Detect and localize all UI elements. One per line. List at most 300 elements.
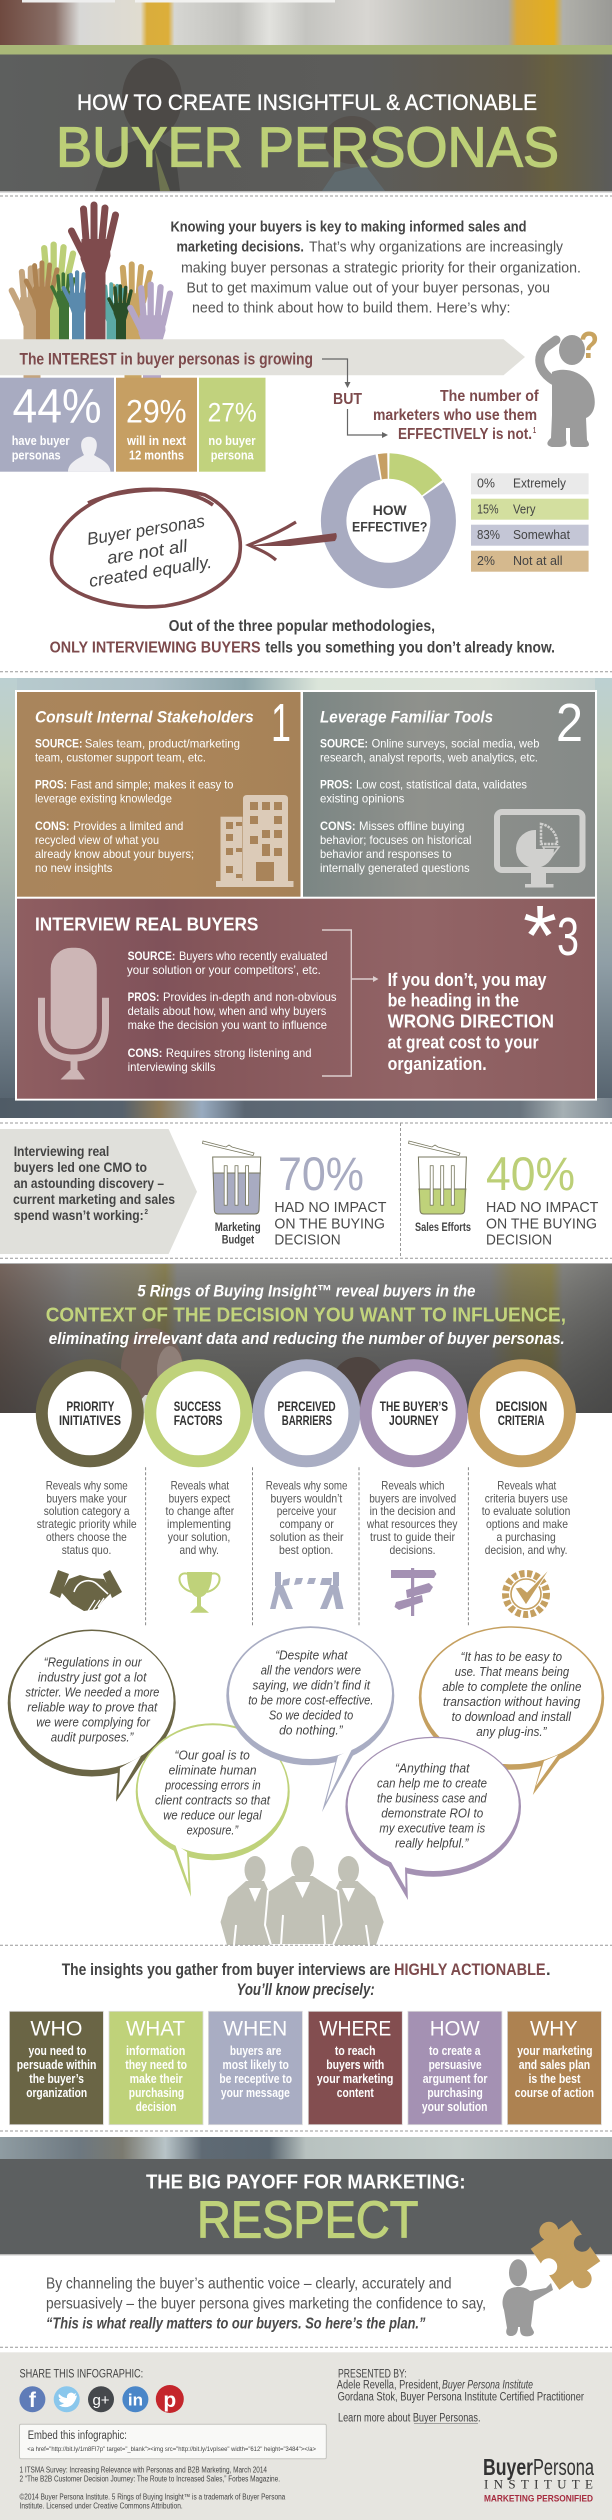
stat: 27% no buyer persona: 27% — [208, 398, 257, 428]
source pros cons text: make the decision you want to influence — [128, 1018, 327, 1032]
warning statement — [388, 970, 554, 1074]
warning statement: organization. — [388, 1054, 487, 1074]
payoff paragraph — [46, 2275, 486, 2332]
stat: 40% no impact: ON THE BUYING — [486, 1215, 597, 1232]
card: when: your message — [221, 2086, 290, 2100]
speech bubble: easy to use — [419, 1626, 604, 1795]
source pros cons text: details about how, when and why buyers — [128, 1004, 326, 1018]
arrow panel: CMO discovery — [0, 1129, 197, 1254]
heading: Consult Internal Stakeholders — [35, 708, 254, 727]
intro paragraph — [170, 220, 581, 316]
ring: priority initiatives — [42, 1365, 138, 1461]
legend: effectiveness: Somewhat — [513, 527, 570, 542]
speech bubble: despite what — [226, 1626, 394, 1812]
stat: 29% will in next 12 months: 12 months — [129, 448, 184, 462]
hand-drawn circle callout: are not all — [105, 535, 190, 568]
source pros cons text: interviewing skills — [128, 1060, 216, 1074]
card: how: your solution — [422, 2100, 488, 2114]
source pros cons text: existing opinions — [320, 791, 404, 805]
photo band with five rings heading — [0, 1263, 612, 1417]
source pros cons text: already know about your buyers; — [35, 847, 194, 861]
speech bubble: goal: exposure.” — [187, 1822, 239, 1837]
arrow banner: interest is growing: The INTEREST in buyer personas is growing — [20, 350, 313, 368]
photo band with five rings heading: 5 Rings of Buying Insight™ reveal buyers in the — [137, 1283, 475, 1301]
icon: trash can marketing budget — [202, 1141, 261, 1246]
logo: Buyer Persona Institute — [483, 2454, 594, 2504]
card: what: WHAT — [126, 2018, 185, 2041]
icon: thinking person — [540, 325, 599, 447]
source pros cons text: behavior and responses to — [320, 847, 452, 861]
icon: person holding puzzle piece — [503, 2207, 611, 2336]
column text: perceived barriers: buyers wouldn’t — [270, 1491, 343, 1505]
BUT label: BUT — [333, 391, 362, 408]
header banner with title — [0, 0, 612, 192]
speech bubble: despite what: to be more cost-effective. — [248, 1692, 374, 1707]
legend: effectiveness: Very — [513, 501, 536, 516]
speech bubble: anything that: demonstrate ROI to — [381, 1806, 483, 1821]
source pros cons text: SOURCE: — [320, 736, 368, 750]
panel: interview real buyers — [17, 889, 595, 1099]
card: where — [308, 2011, 402, 2125]
starred number 3 — [523, 889, 579, 984]
methodologies statement — [50, 618, 555, 656]
speech bubble: despite what: all the vendors were — [261, 1662, 361, 1677]
stat: 44% have buyer personas — [0, 378, 114, 472]
methodologies statement: Out of the three popular methodologies, — [169, 618, 435, 635]
card: why: and sales plan — [519, 2058, 590, 2072]
speech bubble: easy to use: transaction without having — [443, 1694, 581, 1709]
speech bubble: easy to use: “It has to be easy to — [461, 1649, 562, 1664]
main title: BUYER PERSONAS — [56, 116, 559, 180]
ring: success factors: FACTORS — [174, 1412, 222, 1428]
stat: 27% no buyer persona: persona — [211, 448, 255, 462]
icon: raised hands — [12, 205, 170, 407]
speech bubble: easy to use: to download and install — [452, 1709, 572, 1724]
donut chart: how effective: EFFECTIVE? — [352, 519, 427, 535]
card: what: purchasing — [129, 2086, 184, 2100]
card: who: organization — [26, 2086, 87, 2100]
logo: Buyer Persona Institute: MARKETING PERSONIFIED — [484, 2494, 593, 2504]
ring: priority initiatives: PRIORITY — [66, 1398, 115, 1414]
footnotes: 1 ITSMA Survey: Increasing Relevance with Personas and B2B Marketing, March 2014 — [20, 2466, 267, 2475]
card: why: WHY — [530, 2018, 578, 2041]
source pros cons text: CONS: — [35, 819, 70, 833]
card: where: content — [337, 2086, 374, 2100]
intro paragraph: need to think about how to build them. Here’s why: — [192, 300, 510, 316]
column text: priority initiatives: solution category a — [44, 1504, 130, 1518]
source pros cons text: Misses offline buying — [359, 819, 464, 833]
hand-drawn circle callout — [52, 489, 240, 607]
speech bubble: goal: eliminate human — [169, 1762, 257, 1777]
starred number 3: * — [523, 889, 557, 984]
icon: road barrier — [270, 1572, 344, 1609]
card: who — [9, 2011, 103, 2125]
source pros cons text: PROS: — [320, 777, 352, 791]
banner: big payoff respect — [0, 2137, 612, 2256]
card: when: WHEN — [223, 2018, 287, 2041]
source pros cons text: CONS: — [320, 819, 356, 833]
embed box: Embed this infographic: — [28, 2430, 127, 2442]
source pros cons text: team, customer support team, etc. — [35, 750, 206, 764]
source pros cons text: CONS: — [128, 1046, 162, 1060]
source pros cons text — [127, 949, 336, 1074]
source pros cons text: research, analyst reports, web analytics, etc. — [320, 750, 538, 764]
donut chart: how effective — [334, 466, 443, 576]
source pros cons text: Provides a limited and — [73, 819, 183, 833]
card: when: buyers are — [230, 2044, 281, 2058]
card: why: is the best — [528, 2072, 581, 2086]
presented by — [337, 2368, 584, 2425]
stat: 40% no impact — [486, 1147, 598, 1248]
ring: priority initiatives: INITIATIVES — [59, 1412, 121, 1428]
speech bubble: regulations: stricter. We needed a more — [25, 1685, 159, 1700]
source pros cons text: internally generated questions — [320, 861, 470, 875]
banner: big payoff respect: RESPECT — [197, 2191, 418, 2249]
source pros cons text: behavior; focuses on historical — [320, 833, 472, 847]
column text: success factors — [166, 1478, 234, 1557]
panel: consult internal stakeholders — [17, 692, 300, 897]
stat: 44% have buyer personas: 44% — [12, 381, 102, 434]
column text: decision criteria: Reveals what — [497, 1478, 557, 1492]
card: where: buyers with — [326, 2058, 384, 2072]
icon: business people silhouettes — [220, 1846, 384, 1945]
warning statement: WRONG DIRECTION — [388, 1012, 554, 1032]
source pros cons text: your solution or your competitors’, etc. — [127, 963, 321, 977]
card: where: to reach — [335, 2044, 376, 2058]
ring: decision criteria — [474, 1365, 570, 1461]
source pros cons text: PROS: — [35, 777, 67, 791]
card: why: your marketing — [517, 2044, 592, 2058]
source pros cons text: no new insights — [35, 861, 112, 875]
payoff paragraph: By channeling the buyer’s authentic voice – clearly, accurately and — [46, 2275, 452, 2292]
stat: 44% have buyer personas: personas — [12, 448, 61, 462]
speech bubble: regulations: “Regulations in our — [44, 1655, 142, 1670]
warning statement: be heading in the — [388, 991, 519, 1011]
speech bubble: despite what: saying, we didn’t find it — [252, 1677, 371, 1692]
ring: decision criteria: DECISION — [496, 1398, 547, 1414]
speech bubble: goal: client contracts so that — [155, 1792, 271, 1807]
social icons: p — [163, 2389, 176, 2412]
icon: trash can marketing budget: Budget — [222, 1234, 254, 1246]
source pros cons text: PROS: — [128, 990, 159, 1004]
column text: success factors: Reveals what — [171, 1478, 230, 1492]
callout: marketers who use them effectively: EFFECTIVELY is not. — [398, 426, 532, 443]
stat: 29% will in next 12 months: 29% — [126, 394, 187, 430]
heading: insights highly actionable: The insights you gather from buyer interviews are — [62, 1961, 390, 1979]
column text: success factors: your solution, — [168, 1530, 230, 1544]
arrow panel: CMO discovery: buyers led one CMO to — [14, 1159, 147, 1175]
card: what — [109, 2011, 203, 2125]
column text: priority initiatives — [37, 1478, 137, 1557]
stat: 70% no impact: DECISION — [274, 1231, 341, 1248]
donut chart: how effective: HOW — [373, 502, 407, 518]
icon: trash can sales efforts — [408, 1141, 471, 1234]
warning statement: If you don’t, you may — [388, 970, 546, 990]
ring: the buyer's journey: THE BUYER’S — [380, 1398, 448, 1414]
heading: Leverage Familiar Tools — [320, 708, 493, 727]
card: why: course of action — [515, 2086, 594, 2100]
payoff paragraph: persuasively – the buyer persona gives marketing the confidence to say, — [46, 2295, 486, 2312]
icon: trash can marketing budget: Marketing — [215, 1222, 261, 1234]
column text: decision criteria — [482, 1478, 570, 1557]
source pros cons text — [35, 736, 240, 875]
column text: success factors: and why. — [180, 1543, 219, 1557]
legend: effectiveness — [471, 473, 589, 572]
card: when — [208, 2011, 302, 2125]
column text: success factors: implementing — [167, 1517, 231, 1531]
card: how: purchasing — [427, 2086, 483, 2100]
column text: priority initiatives: buyers make your — [46, 1491, 127, 1505]
speech bubble: goal — [136, 1723, 290, 1897]
hand-drawn circle callout: created equally. — [87, 552, 213, 591]
ring: the buyer's journey — [366, 1365, 462, 1461]
warning statement: at great cost to your — [388, 1032, 539, 1052]
column text: priority initiatives: others choose the — [46, 1530, 127, 1544]
column text: decision criteria: decision, and why. — [485, 1543, 568, 1557]
photo background: methodologies — [0, 678, 612, 1118]
speech bubble: despite what: “Despite what — [275, 1647, 349, 1662]
footnotes: 2 “The B2B Customer Decision Journey: The Route to Increased Sales,” Forbes Magazine. — [20, 2475, 280, 2484]
heading: insights highly actionable: HIGHLY ACTIONABLE — [394, 1961, 546, 1979]
photo band with five rings heading: CONTEXT OF THE DECISION YOU WANT TO INFLUENCE, — [46, 1305, 566, 1327]
heading: INTERVIEW REAL BUYERS — [35, 914, 258, 935]
speech bubble: regulations: industry just got a lot — [38, 1670, 148, 1685]
legend: effectiveness: 0% — [477, 475, 495, 490]
source pros cons text: Online surveys, social media, web — [372, 736, 540, 750]
column text: priority initiatives: strategic priority while — [37, 1517, 137, 1531]
column text: perceived barriers: company or — [280, 1517, 334, 1531]
speech bubble: regulations: audit purposes.” — [51, 1730, 134, 1745]
card: where: WHERE — [319, 2018, 391, 2041]
arrow: donut to callout — [249, 522, 337, 560]
speech bubble: easy to use: able to complete the online — [442, 1679, 582, 1694]
methodologies statement: tells you something you don’t already know. — [265, 639, 555, 656]
column text: decision criteria: to evaluate solution — [482, 1504, 570, 1518]
legend: effectiveness: Extremely — [513, 475, 566, 490]
column text: decision criteria: a purchasing — [496, 1530, 556, 1544]
card: what: decision — [136, 2100, 176, 2114]
card: who: WHO — [30, 2018, 82, 2041]
column text: priority initiatives: status quo. — [62, 1543, 111, 1557]
column text: priority initiatives: Reveals why some — [46, 1478, 128, 1492]
stat: 70% no impact: ON THE BUYING — [274, 1215, 385, 1232]
icon: handshake — [50, 1570, 122, 1611]
icon: office buildings — [216, 795, 294, 887]
intro paragraph: making buyer personas a strategic priority for their organization. — [181, 260, 581, 276]
callout: marketers who use them effectively: 1 — [533, 426, 536, 435]
stat: 29% will in next 12 months: will in next — [126, 434, 187, 448]
social icons: f — [29, 2389, 37, 2412]
column text: perceived barriers: best option. — [279, 1543, 333, 1557]
column text: the buyer's journey: in the decision and — [370, 1504, 456, 1518]
source pros cons text: SOURCE: — [128, 949, 175, 963]
intro paragraph: But to get maximum value out of your buyer personas, you — [186, 280, 550, 296]
ring: perceived barriers: PERCEIVED — [278, 1398, 336, 1414]
column text: success factors: to change after — [166, 1504, 234, 1518]
source pros cons text: Provides in-depth and non-obvious — [163, 990, 336, 1004]
starred number 3: 3 — [557, 907, 579, 967]
embed box — [20, 2424, 326, 2459]
column text: the buyer's journey: Reveals which — [381, 1478, 444, 1492]
arrow panel: CMO discovery: an astounding discovery – — [14, 1175, 164, 1191]
connector arrows to BUT — [322, 359, 388, 438]
stat: 70% no impact — [274, 1147, 386, 1248]
source pros cons text: Fast and simple; makes it easy to — [70, 777, 234, 791]
title line: HOW TO CREATE INSIGHTFUL & ACTIONABLE — [77, 90, 537, 115]
card: why — [507, 2011, 601, 2125]
footnotes: Institute. Licensed under Creative Commons Attribution. — [20, 2502, 183, 2511]
column text: perceived barriers: solution as their — [270, 1530, 344, 1544]
number 2: 2 — [556, 693, 583, 753]
footnotes: ©2014 Buyer Persona Institute. 5 Rings of Buying Insight™ is a trademark of Buyer Persona — [20, 2493, 286, 2502]
card: who: persuade within — [17, 2058, 96, 2072]
icon: microphone — [42, 948, 106, 1080]
speech bubble: regulations: reliable way to prove that — [27, 1700, 159, 1715]
stat: 40% no impact: 40% — [486, 1147, 575, 1200]
column text: decision criteria: criteria buyers use — [485, 1491, 568, 1505]
arrow panel: CMO discovery: Interviewing real — [14, 1143, 109, 1159]
banner: big payoff respect: THE BIG PAYOFF FOR MARKETING: — [146, 2171, 466, 2193]
stat: 40% no impact: HAD NO IMPACT — [486, 1199, 598, 1216]
stat: 70% no impact: HAD NO IMPACT — [274, 1199, 386, 1216]
legend: effectiveness: 83% — [477, 527, 500, 542]
number 1: 1 — [271, 693, 291, 753]
column text: the buyer's journey — [366, 1478, 458, 1557]
source pros cons text: Sales team, product/marketing — [85, 736, 240, 750]
speech bubble: goal: “Our goal is to — [174, 1747, 250, 1762]
card: how — [408, 2011, 502, 2125]
ring: perceived barriers: BARRIERS — [282, 1412, 332, 1428]
heading: insights highly actionable: . — [546, 1961, 551, 1979]
ring: perceived barriers — [258, 1365, 354, 1461]
ring: the buyer's journey: JOURNEY — [389, 1412, 439, 1428]
card: when: most likely to — [222, 2058, 289, 2072]
speech bubble: despite what: So we decided to — [269, 1707, 353, 1722]
speech bubble: despite what: do nothing.” — [279, 1722, 343, 1737]
source pros cons text: Requires strong listening and — [166, 1046, 312, 1060]
stat: 29% will in next 12 months — [116, 378, 197, 472]
source pros cons text: Low cost, statistical data, validates — [356, 777, 527, 791]
card: how: persuasive — [429, 2058, 482, 2072]
payoff paragraph: “This is what really matters to our buyers. So here’s the plan.” — [46, 2315, 425, 2332]
column text: the buyer's journey: trust to guide their — [370, 1530, 455, 1544]
icon: trophy — [179, 1572, 220, 1613]
column text: perceived barriers: perceive your — [277, 1504, 336, 1518]
card: how: argument for — [423, 2072, 488, 2086]
heading: insights highly actionable: You’ll know precisely: — [236, 1981, 375, 1999]
stat: 44% have buyer personas: have buyer — [12, 434, 70, 448]
stat: 27% no buyer persona: no buyer — [208, 434, 256, 448]
speech bubble: anything that: “Anything that — [395, 1761, 471, 1776]
source pros cons text: Buyers who recently evaluated — [179, 949, 328, 963]
intro paragraph: marketing decisions. — [176, 240, 304, 256]
card: how: HOW — [430, 2018, 480, 2041]
source pros cons text: recycled view of what you — [35, 833, 159, 847]
card: who: you need to — [28, 2044, 87, 2058]
card: what: information — [126, 2044, 185, 2058]
card: where: your marketing — [317, 2072, 393, 2086]
card: what: make their — [130, 2072, 183, 2086]
stat: 27% no buyer persona — [199, 378, 266, 472]
hand-drawn circle callout: Buyer personas — [85, 511, 206, 549]
methodologies statement: ONLY INTERVIEWING BUYERS — [50, 639, 261, 656]
ring: decision criteria: CRITERIA — [498, 1412, 544, 1428]
social icons: in — [128, 2390, 143, 2410]
photo band with five rings heading: eliminating irrelevant data and reducing the number of buyer personas. — [49, 1330, 565, 1348]
speech bubble: goal: processing errors in — [164, 1777, 261, 1792]
speech bubble: anything that: really helpful.” — [395, 1836, 469, 1851]
logo: Buyer Persona Institute: INSTITUTE — [484, 2476, 593, 2491]
column text: the buyer's journey: buyers are involved — [369, 1491, 456, 1505]
social icons: g+ — [92, 2392, 110, 2409]
logo: Buyer Persona Institute: Buyer — [483, 2454, 533, 2480]
speech bubble: regulations: we were complying for — [36, 1715, 150, 1730]
presented by: Buyer Persona Institute — [442, 2380, 533, 2392]
column text: perceived barriers: Reveals why some — [266, 1478, 348, 1492]
callout: marketers who use them effectively — [373, 388, 539, 443]
panel: leverage familiar tools — [303, 692, 595, 897]
speech bubble: goal: we reduce our legal — [163, 1807, 263, 1822]
legend: effectiveness: Not at all — [513, 553, 563, 568]
column text: decision criteria: options and make — [486, 1517, 568, 1531]
embed box: <a href="http://bit.ly/1m8FI7p" target="_blank"><img src="http://bit.ly/1vpIsee" width="612" height="3484"></a> — [27, 2447, 316, 2453]
arrow panel: CMO discovery: 2 — [144, 1209, 148, 1216]
legend: effectiveness: 2% — [477, 553, 495, 568]
footnotes — [20, 2466, 286, 2511]
card: who: the buyer’s — [29, 2072, 84, 2086]
speech bubble: regulations — [8, 1630, 176, 1802]
arrow banner: interest is growing — [0, 339, 525, 375]
column text: the buyer's journey: decisions. — [390, 1543, 436, 1557]
arrow panel: CMO discovery: current marketing and sales — [13, 1191, 175, 1207]
card: how: to create a — [429, 2044, 481, 2058]
presented by: Adele Revella, President, — [337, 2380, 441, 2392]
icon: trash can sales efforts: Sales Efforts — [415, 1222, 471, 1234]
bracket arrow — [322, 930, 378, 1076]
card: what: they need to — [125, 2058, 187, 2072]
presented by: PRESENTED BY: — [338, 2368, 407, 2380]
callout: marketers who use them effectively: marketers who use them — [373, 407, 537, 424]
icon: person silhouette — [68, 437, 110, 472]
arrow panel: CMO discovery: spend wasn’t working: — [14, 1207, 144, 1223]
icon: badge with check mark — [506, 1567, 551, 1614]
column text: perceived barriers — [266, 1478, 348, 1557]
icon: monitor with pie chart — [497, 812, 582, 888]
speech bubble: anything that: can help me to create — [377, 1776, 487, 1791]
icon: signpost — [391, 1568, 436, 1616]
share heading: SHARE THIS INFOGRAPHIC: — [20, 2368, 143, 2380]
speech bubble: easy to use: use. That means being — [455, 1664, 570, 1679]
ring: success factors — [150, 1365, 246, 1461]
speech bubble: easy to use: any plug-ins.” — [476, 1724, 547, 1739]
card: when: be receptive to — [219, 2072, 292, 2086]
callout: marketers who use them effectively: The number of — [440, 388, 539, 405]
social icons — [19, 2385, 184, 2413]
speech bubble: anything that: the business case and — [377, 1791, 487, 1806]
column text: the buyer's journey: what resources they — [366, 1517, 458, 1531]
source pros cons text — [320, 736, 540, 875]
source pros cons text: leverage existing knowledge — [35, 791, 172, 805]
column text: success factors: buyers expect — [169, 1491, 231, 1505]
speech bubble: anything that — [345, 1737, 521, 1900]
stat: 70% no impact: 70% — [278, 1147, 364, 1200]
source pros cons text: SOURCE: — [35, 736, 82, 750]
footer panel — [0, 2352, 612, 2520]
speech bubble: anything that: my executive team is — [379, 1821, 486, 1836]
heading: insights highly actionable — [62, 1961, 551, 1999]
icon: thinking person: ? — [579, 325, 599, 367]
intro paragraph: Knowing your buyers is key to making informed sales and — [170, 220, 526, 236]
